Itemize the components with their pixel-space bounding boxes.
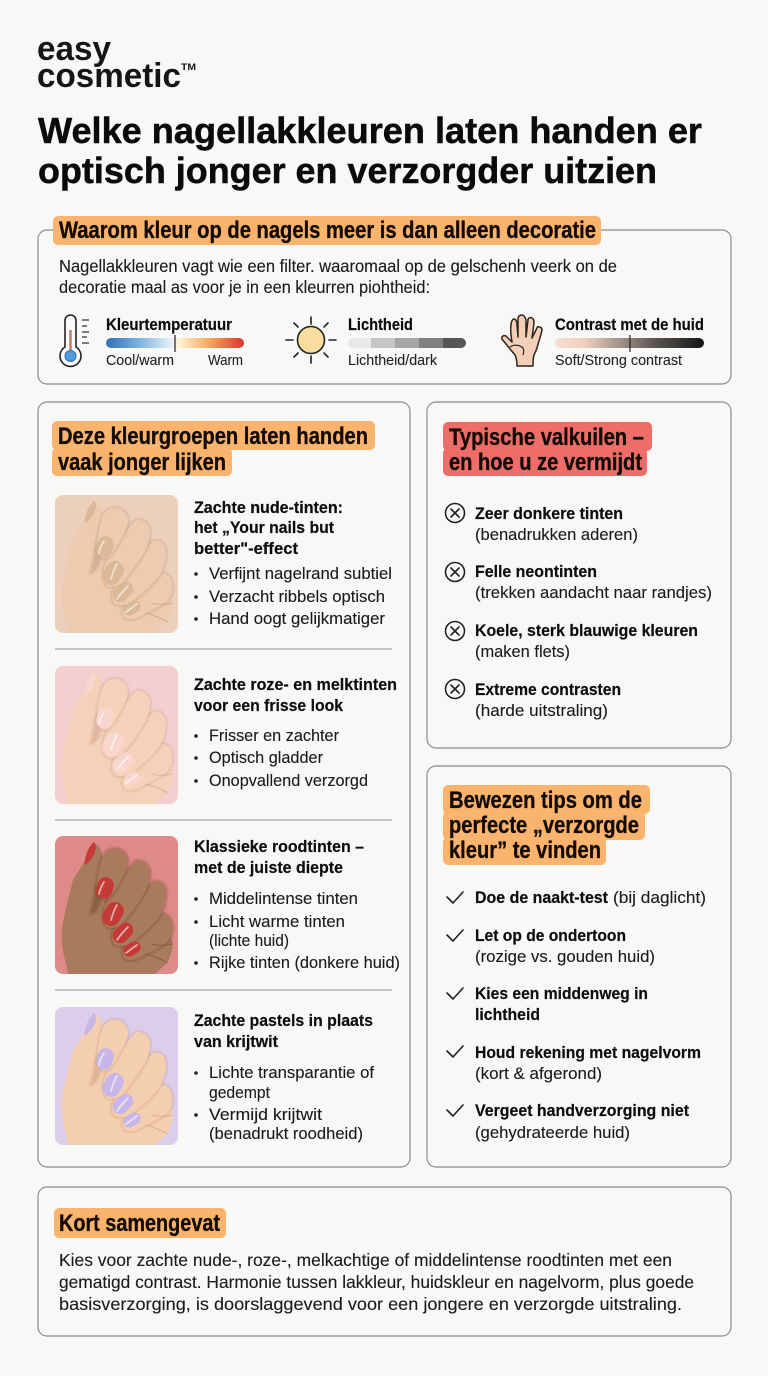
scale: kleurtemperatuur: Warm (208, 353, 243, 369)
intro text (59, 256, 617, 297)
scale: contrast met de huid (555, 315, 704, 369)
heading: bewezen tips: Bewezen tips om de (449, 787, 642, 814)
heading: waarom kleur: Waarom kleur op de nagels meer is dan alleen decoratie (59, 217, 596, 244)
heading: bewezen tips: perfecte „verzorgde (449, 812, 639, 839)
scale: lichtheid: Lichtheid (348, 315, 413, 334)
item: klassieke roodtinten: met de juiste diepte (194, 858, 343, 877)
heading: kleurgroepen (52, 421, 375, 476)
logo: easy cosmetic (37, 30, 196, 95)
item: zeer donkere tinten: Zeer donkere tinten (475, 504, 623, 523)
item: klassieke roodtinten: Licht warme tinten (209, 912, 345, 931)
item: koele kleuren (446, 621, 698, 661)
panel: kleurgroepen (38, 402, 410, 1167)
item: handverzorging (447, 1101, 689, 1142)
item: middenweg: lichtheid (475, 1005, 540, 1024)
icon: sun (286, 317, 336, 363)
icon: hand (502, 315, 542, 366)
item: zachte pastels: Zachte pastels in plaats (194, 1011, 373, 1030)
item: zachte nude-tinten: Hand oogt gelijkmatiger (209, 609, 385, 628)
item: zachte pastels: Lichte transparantie of (209, 1063, 374, 1082)
heading: kleurgroepen: Deze kleurgroepen laten handen (58, 423, 368, 450)
item: middenweg (447, 984, 648, 1024)
panel: kort samengevat (38, 1187, 731, 1336)
intro text: decoratie maal as voor je in een kleurren piohtheid: (59, 277, 430, 297)
item: klassieke roodtinten: Klassieke roodtinten – (194, 837, 364, 856)
item: zachte roze- en melktinten (194, 675, 397, 790)
photo: lilac nails (55, 1007, 178, 1145)
item: nagelvorm (447, 1043, 701, 1083)
item: zachte roze- en melktinten: Frisser en zachter (209, 726, 339, 745)
scale: kleurtemperatuur: Cool/warm (106, 353, 174, 369)
heading: valkuilen: en hoe u ze vermijdt (449, 449, 642, 476)
item: zachte roze- en melktinten: Zachte roze- en melktinten (194, 675, 397, 694)
title: optisch jonger en verzorgder uitzien (38, 150, 657, 191)
item: felle neontinten (446, 562, 712, 602)
item: zachte nude-tinten: Verfijnt nagelrand subtiel (209, 564, 392, 583)
item: klassieke roodtinten: Middelintense tinten (209, 889, 358, 908)
summary text (59, 1250, 694, 1314)
item: zeer donkere tinten: (benadrukken aderen) (475, 525, 638, 544)
item: zachte nude-tinten: better"-effect (194, 539, 298, 558)
heading: bewezen tips: kleur” te vinden (449, 837, 601, 864)
item: ondertoon (447, 926, 655, 966)
item: zachte roze- en melktinten: voor een frisse look (194, 696, 343, 715)
title: Welke nagellakkleuren laten handen er (38, 110, 702, 151)
heading: valkuilen: Typische valkuilen – (449, 424, 644, 451)
item: zachte nude-tinten: het „Your nails but (194, 518, 334, 537)
summary text: Kies voor zachte nude-, roze-, melkachtige of middelintense roodtinten met een (59, 1250, 672, 1270)
logo: easy cosmetic: easy (37, 30, 111, 68)
item: felle neontinten: Felle neontinten (475, 562, 597, 581)
item: zachte nude-tinten (194, 498, 392, 628)
item: nagelvorm: Houd rekening met nagelvorm (475, 1043, 701, 1062)
panel: bewezen tips (427, 766, 731, 1167)
heading: kort samengevat: Kort samengevat (59, 1210, 220, 1237)
photo: nude nails (55, 495, 178, 633)
scale: contrast met de huid: Soft/Strong contrast (555, 353, 682, 369)
item: zachte roze- en melktinten: Optisch gladder (209, 748, 323, 767)
panel: valkuilen (427, 402, 731, 748)
panel: waarom kleur (38, 216, 731, 384)
item: zeer donkere tinten (446, 504, 638, 544)
item: handverzorging: (gehydrateerde huid) (475, 1123, 630, 1142)
scale: lichtheid: Lichtheid/dark (348, 353, 438, 369)
item: extreme contrasten: (harde uitstraling) (475, 701, 608, 720)
scale: kleurtemperatuur (106, 315, 244, 369)
item: extreme contrasten (446, 680, 621, 720)
item: klassieke roodtinten: (lichte huid) (209, 931, 289, 950)
logo: easy cosmetic: TM (181, 62, 196, 72)
item: zachte pastels (194, 1011, 374, 1143)
item: felle neontinten: (trekken aandacht naar randjes) (475, 583, 712, 602)
item: naakt-test: (bij daglicht) (613, 888, 706, 907)
scale: lichtheid (348, 315, 466, 369)
item: zachte pastels: van krijtwit (194, 1032, 278, 1051)
item: ondertoon: (rozige vs. gouden huid) (475, 947, 655, 966)
item: koele kleuren: (maken flets) (475, 642, 570, 661)
item: naakt-test (447, 888, 706, 907)
summary text: gematigd contrast. Harmonie tussen lakkleur, huidskleur en nagelvorm, plus goede (59, 1272, 694, 1292)
item: zachte pastels: (benadrukt roodheid) (209, 1124, 363, 1143)
photo: red nails (55, 836, 178, 974)
title (38, 110, 702, 191)
item: koele kleuren: Koele, sterk blauwige kleuren (475, 621, 698, 640)
intro text: Nagellakkleuren vagt wie een filter. waaromaal op de gelschenh veerk on de (59, 256, 617, 276)
heading: valkuilen (443, 422, 652, 476)
item: nagelvorm: (kort & afgerond) (475, 1064, 602, 1083)
item: zachte pastels: Vermijd krijtwit (209, 1105, 322, 1124)
heading: kleurgroepen: vaak jonger lijken (58, 449, 226, 476)
photo: pink nails (55, 666, 178, 804)
icon: thermometer (60, 315, 89, 366)
item: zachte nude-tinten: Zachte nude-tinten: (194, 498, 343, 517)
item: zachte roze- en melktinten: Onopvallend verzorgd (209, 771, 368, 790)
item: zachte nude-tinten: Verzacht ribbels optisch (209, 587, 385, 606)
item: extreme contrasten: Extreme contrasten (475, 680, 621, 699)
item: ondertoon: Let op de ondertoon (475, 926, 626, 945)
logo: easy cosmetic: cosmetic (37, 57, 181, 95)
item: naakt-test: Doe de naakt-test (475, 888, 608, 907)
scale: contrast met de huid: Contrast met de huid (555, 315, 704, 334)
item: klassieke roodtinten: Rijke tinten (donkere huid) (209, 953, 400, 972)
item: klassieke roodtinten (194, 837, 400, 972)
summary text: basisverzorging, is doorslaggevend voor een jongere en verzorgde uitstraling. (59, 1294, 682, 1314)
item: middenweg: Kies een middenweg in (475, 984, 648, 1003)
item: handverzorging: Vergeet handverzorging niet (475, 1101, 689, 1120)
scale: kleurtemperatuur: Kleurtemperatuur (106, 315, 232, 334)
item: zachte pastels: gedempt (209, 1083, 270, 1102)
heading: bewezen tips (443, 785, 650, 865)
